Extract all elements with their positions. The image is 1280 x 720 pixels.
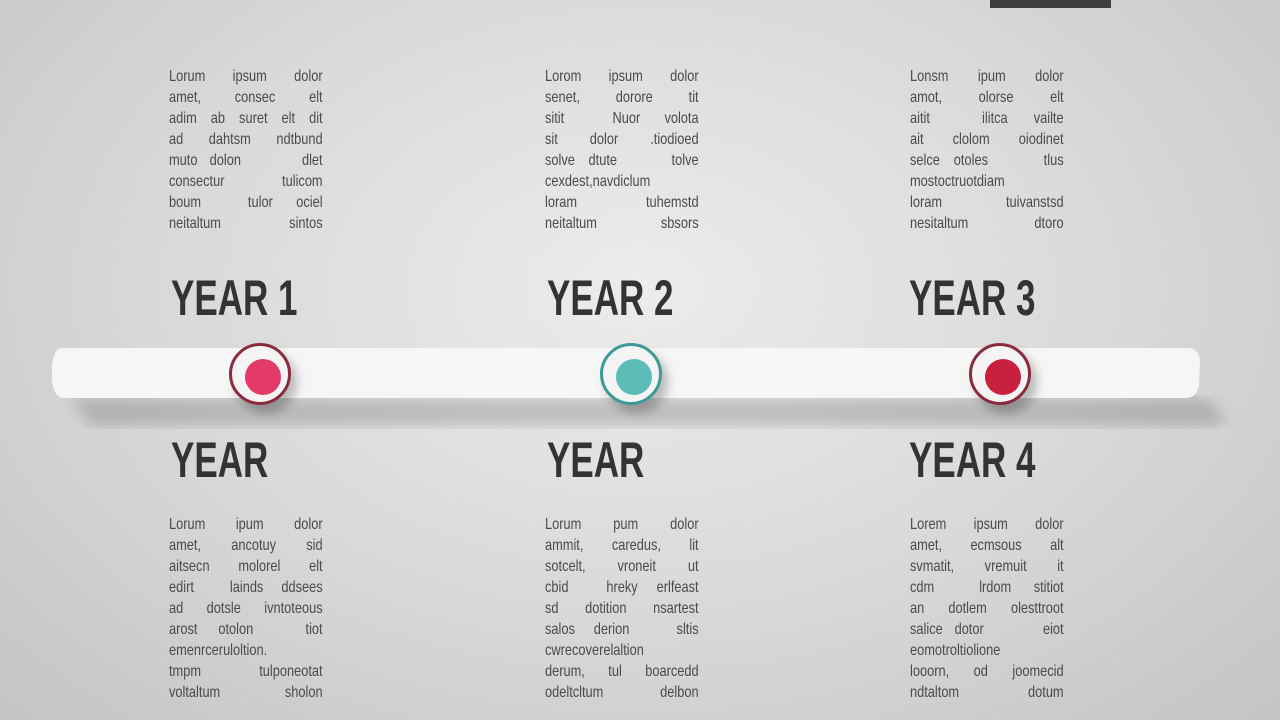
marker: year 3 [969,343,1031,405]
text block: year 3 top: selce otoles tlus [910,152,1064,169]
text block: bottom 2: ammit, caredus, lit [545,537,699,554]
text block: bottom 3: looorn, od joomecid [910,663,1064,680]
text block: year 3 top: loram tuivanstsd [910,194,1064,211]
text block: bottom 3: ndtaltom dotum [910,684,1064,701]
text block: year 2 top: loram tuhemstd [545,194,699,211]
text block: bottom 3: cdm lrdom stitiot [910,579,1064,596]
text block: bottom 3: eomotroltiolione [910,642,1000,659]
text block: year 1 top: adim ab suret elt dit [169,110,323,127]
text block: bottom 1: edirt lainds ddsees [169,579,323,596]
text block: bottom 1: voltaltum sholon [169,684,323,701]
text block: bottom 2: sotcelt, vroneit ut [545,558,699,575]
text block: year 2 top: sit dolor .tiodioed [545,131,699,148]
text block: year 1 top: boum tulor ociel [169,194,323,211]
text block: year 2 top: cexdest,navdiclum [545,173,650,190]
text block: bottom 1: tmpm tulponeotat [169,663,323,680]
top dark tab [990,0,1111,8]
text block: year 3 top: amot, olorse elt [910,89,1064,106]
heading: YEAR 2: YEAR 2 [547,270,673,326]
text block: year 1 top [169,68,323,232]
text block: bottom 2 [545,516,699,701]
timeline bar [52,348,1225,429]
marker: year 1 [229,343,291,405]
text block: bottom 1: emenrceruloltion. [169,642,267,659]
text block: bottom 3: svmatit, vremuit it [910,558,1064,575]
heading: YEAR: YEAR [171,432,268,488]
text block: year 1 top: Lorum ipsum dolor [169,68,323,85]
text block: year 2 top [545,68,699,232]
heading: YEAR 4: YEAR 4 [909,432,1035,488]
text block: year 2 top: sitit Nuor volota [545,110,699,127]
text block: year 3 top: Lonsm ipum dolor [910,68,1064,85]
text block: bottom 3: Lorem ipsum dolor [910,516,1064,533]
text block: year 3 top: ait clolom oiodinet [910,131,1064,148]
text block: bottom 2: odeltcltum delbon [545,684,699,701]
text block: bottom 1: arost otolon tiot [169,621,323,638]
text block: bottom 3 [910,516,1064,701]
heading: YEAR (2): YEAR [547,432,644,488]
text block: bottom 1: aitsecn molorel elt [169,558,323,575]
text block: bottom 1: amet, ancotuy sid [169,537,323,554]
text block: bottom 1: Lorum ipum dolor [169,516,323,533]
text block: year 1 top: consectur tulicom [169,173,323,190]
heading: YEAR 1: YEAR 1 [171,270,297,326]
text block: year 2 top: senet, dorore tit [545,89,699,106]
text block: year 2 top: Lorom ipsum dolor [545,68,699,85]
text block: bottom 2: cbid hreky erlfeast [545,579,699,596]
text block: bottom 2: cwrecoverelaltion [545,642,644,659]
text block: year 1 top: ad dahtsm ndtbund [169,131,323,148]
text block: bottom 2: Lorum pum dolor [545,516,699,533]
text block: year 3 top: nesitaltum dtoro [910,215,1064,232]
text block: bottom 1: ad dotsle ivntoteous [169,600,323,617]
text block: year 1 top: muto dolon dlet [169,152,323,169]
heading: YEAR 3: YEAR 3 [909,270,1035,326]
text block: bottom 2: sd dotition nsartest [545,600,699,617]
text block: bottom 1 [169,516,323,701]
text block: year 2 top: neitaltum sbsors [545,215,699,232]
text block: bottom 3: salice dotor eiot [910,621,1064,638]
text block: bottom 2: salos derion sltis [545,621,699,638]
text block: year 3 top: aitit ilitca vailte [910,110,1064,127]
text block: bottom 2: derum, tul boarcedd [545,663,699,680]
text block: bottom 3: amet, ecmsous alt [910,537,1064,554]
text block: year 1 top: amet, consec elt [169,89,323,106]
text block: year 1 top: neitaltum sintos [169,215,323,232]
text block: bottom 3: an dotlem olesttroot [910,600,1064,617]
text block: year 2 top: solve dtute tolve [545,152,699,169]
marker: year 2 [600,343,662,405]
text block: year 3 top [910,68,1064,232]
text block: year 3 top: mostoctruotdiam [910,173,1005,190]
